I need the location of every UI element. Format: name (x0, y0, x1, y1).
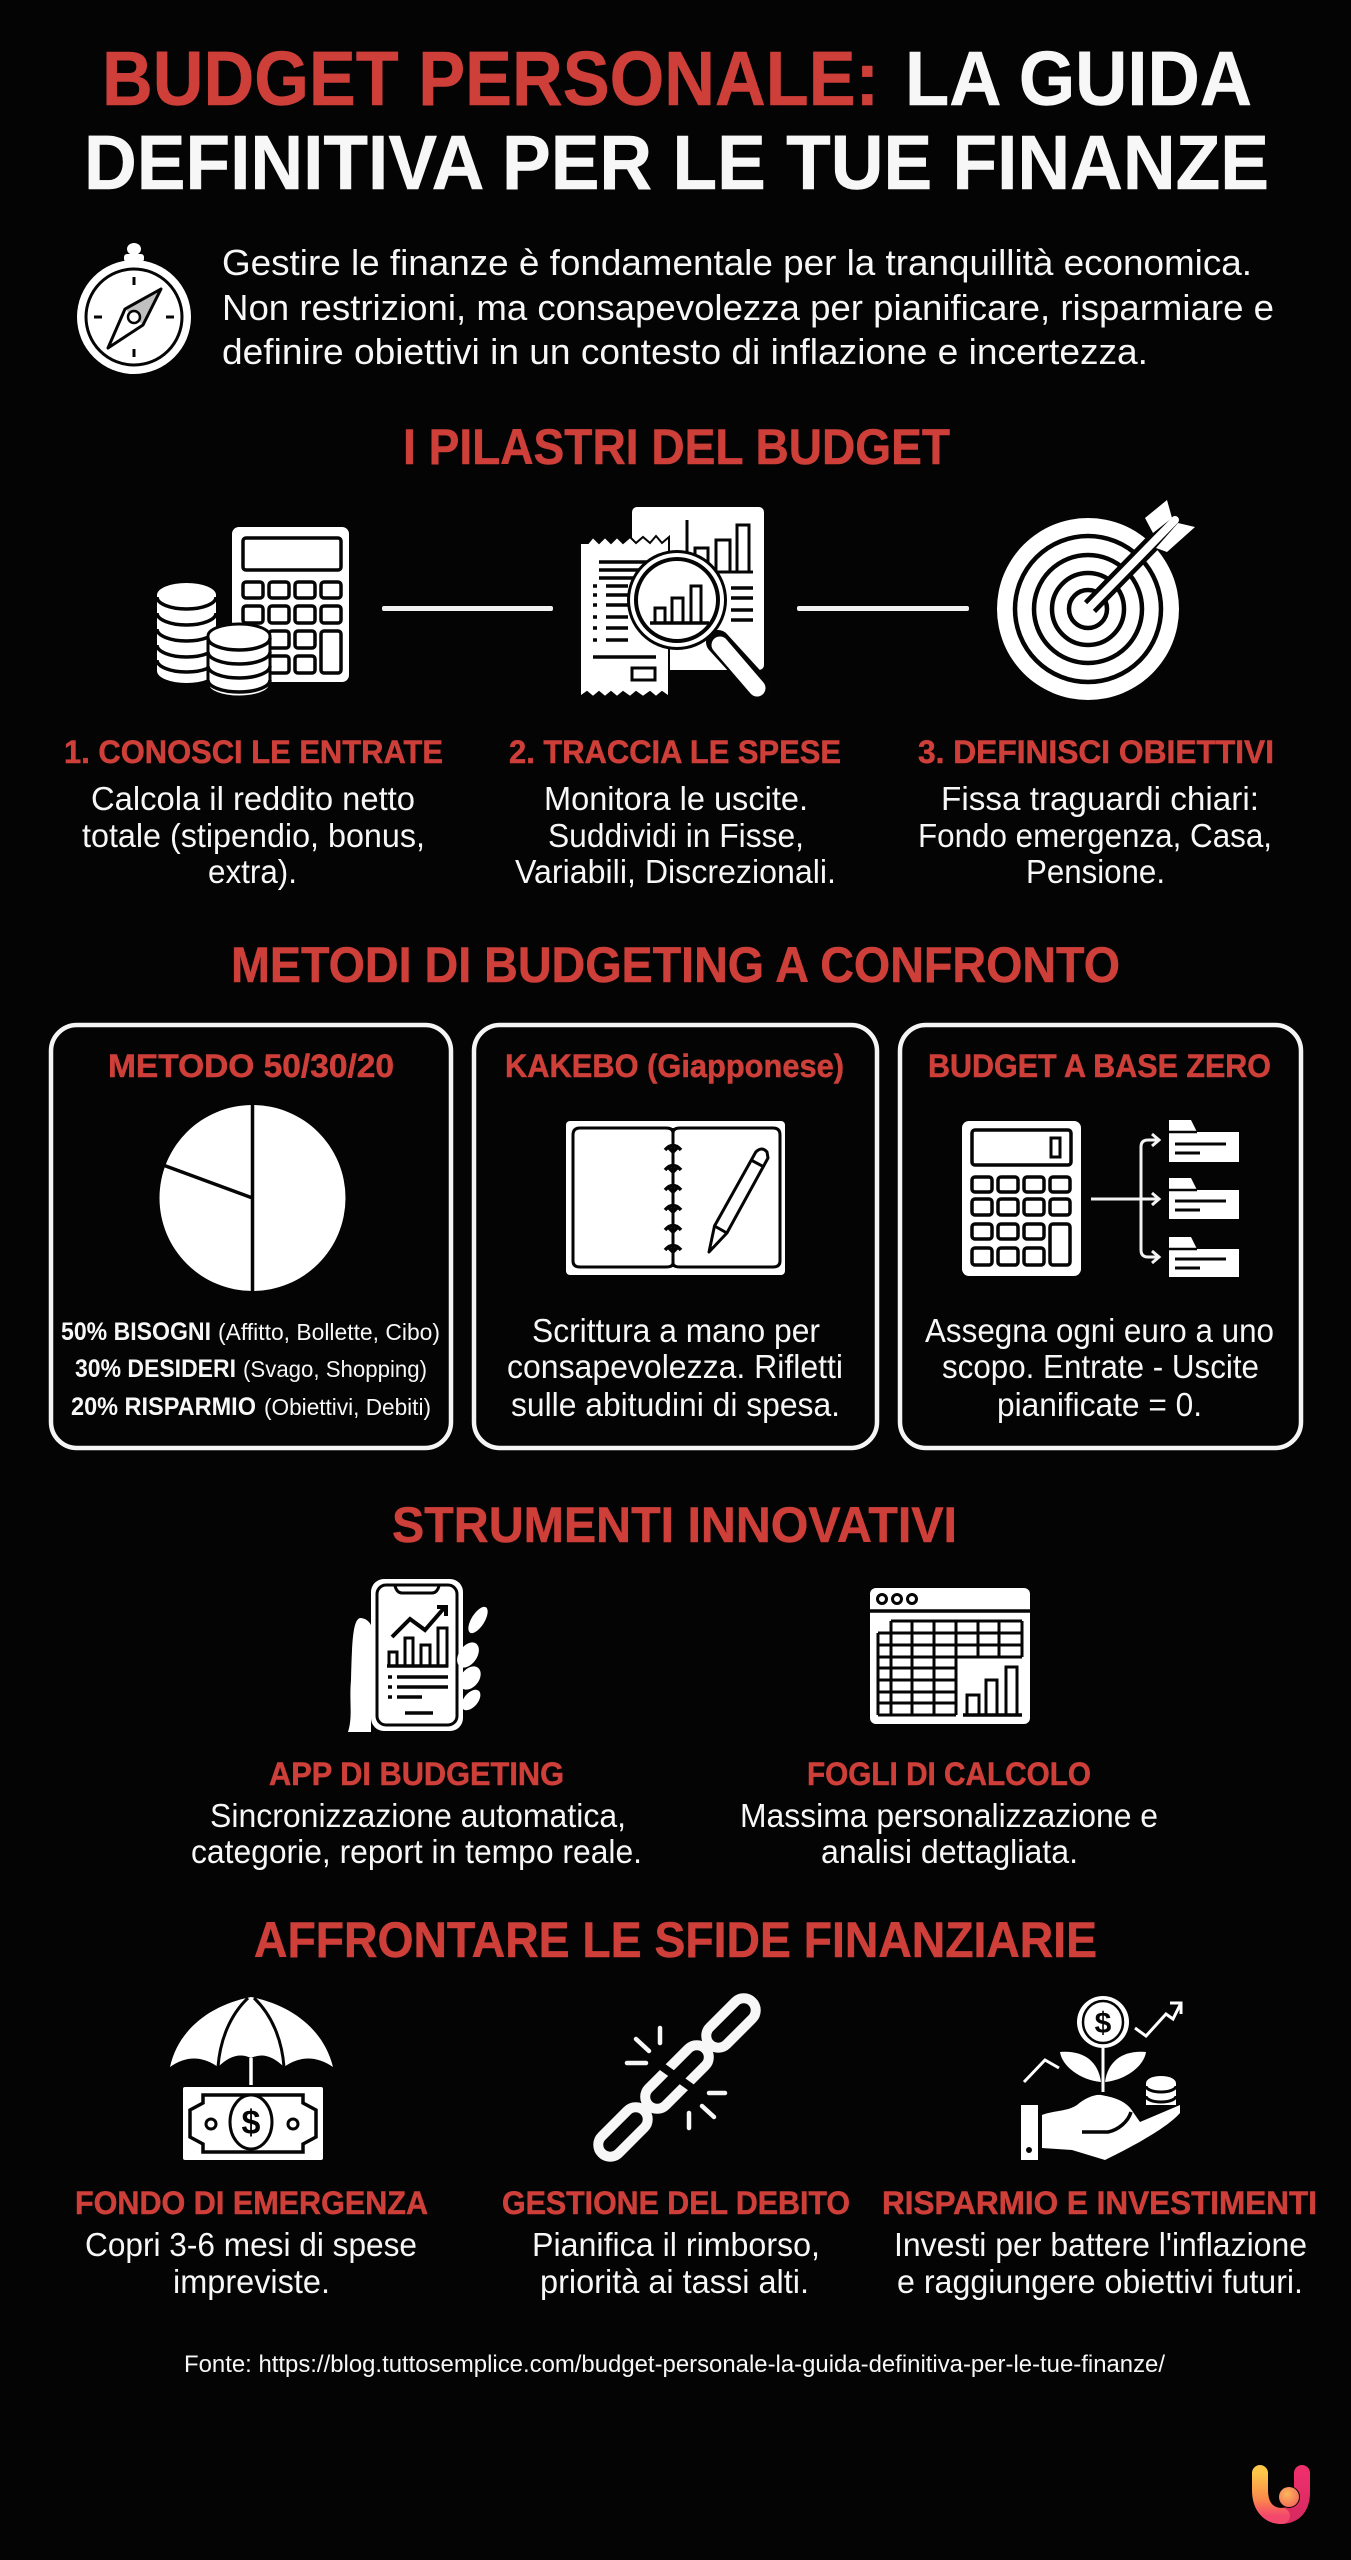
tool 1 text: APP DI BUDGETING (269, 1756, 564, 1792)
challenge 1 text (75, 2185, 428, 2300)
intro text: Gestire le finanze è fondamentale per la tranquillità economica. (222, 242, 1252, 283)
challenge 1 text: impreviste. (173, 2263, 330, 2300)
panel: budget a base zero (900, 1025, 1301, 1448)
intro text: definire obiettivi in un contesto di inflazione e incertezza. (222, 331, 1148, 372)
title: DEFINITIVA PER LE TUE FINANZE (84, 120, 1269, 206)
card text (925, 1312, 1274, 1423)
split legend: 50% BISOGNI (61, 1318, 211, 1346)
tool 2 text: FOGLI DI CALCOLO (807, 1756, 1091, 1792)
icon: target with arrow (997, 500, 1195, 700)
card title: KAKEBO (Giapponese) (505, 1048, 844, 1084)
heading: sfide: AFFRONTARE LE SFIDE FINANZIARIE (254, 1912, 1097, 1968)
panel: pilastri (64, 500, 1274, 890)
pillar 3 text (918, 734, 1274, 890)
pie chart (160, 1105, 346, 1291)
icon: calculator and coins (157, 527, 349, 697)
challenge 2 text: priorità ai tassi alti. (540, 2263, 809, 2300)
challenge 2 text: GESTIONE DEL DEBITO (502, 2185, 850, 2221)
intro text: Non restrizioni, ma consapevolezza per pianificare, risparmiare e (222, 287, 1274, 328)
icon: receipt and magnifier (580, 507, 764, 697)
icon: spreadsheet (870, 1588, 1030, 1724)
challenge 1 text: FONDO DI EMERGENZA (75, 2185, 428, 2221)
tool 1 text (191, 1756, 642, 1870)
pillar 1 text: totale (stipendio, bonus, (82, 817, 425, 854)
card text: Scrittura a mano per (532, 1312, 820, 1349)
challenge 1 text: Copri 3-6 mesi di spese (85, 2226, 417, 2263)
pillar 2 text: Suddividi in Fisse, (548, 817, 804, 854)
icon: investment growth hand (1021, 1996, 1181, 2160)
split legend: (Obiettivi, Debiti) (264, 1394, 431, 1420)
pillar 1 text: Calcola il reddito netto (91, 780, 415, 817)
logo (1260, 2473, 1302, 2516)
icon: compass (77, 243, 191, 374)
icon: phone in hand (348, 1579, 491, 1732)
card title: METODO 50/30/20 (108, 1048, 394, 1084)
pillar 2 text (509, 734, 841, 890)
icon: notebook and pen (566, 1121, 785, 1275)
pillar 2 text: 2. TRACCIA LE SPESE (509, 734, 841, 770)
card title: BUDGET A BASE ZERO (928, 1048, 1271, 1084)
tool 2 text: analisi dettagliata. (821, 1833, 1078, 1870)
tool 1 text: Sincronizzazione automatica, (210, 1797, 626, 1834)
heading: metodi: METODI DI BUDGETING A CONFRONTO (231, 937, 1120, 993)
card text: scopo. Entrate - Uscite (942, 1348, 1259, 1385)
tool 1 text: categorie, report in tempo reale. (191, 1833, 642, 1870)
pillar 3 text: Fondo emergenza, Casa, (918, 817, 1272, 854)
card text: Assegna ogni euro a uno (925, 1312, 1274, 1349)
tool 2 text: Massima personalizzazione e (740, 1797, 1158, 1834)
card text (507, 1312, 843, 1423)
split legend (61, 1318, 440, 1421)
tool 2 text (740, 1756, 1158, 1870)
panel: metodo 50/30/20 (51, 1025, 451, 1448)
challenge 3 text (882, 2185, 1317, 2300)
source line: Fonte: https://blog.tuttosemplice.com/budget-personale-la-guida-definitiva-per-le-tue-finanze/ (184, 2351, 1165, 2378)
pillar 3 text: Fissa traguardi chiari: (941, 780, 1259, 817)
challenge 3 text: e raggiungere obiettivi futuri. (897, 2263, 1303, 2300)
card text: pianificate = 0. (997, 1386, 1202, 1423)
intro text (222, 242, 1274, 372)
split legend: (Affitto, Bollette, Cibo) (218, 1319, 440, 1345)
pillar 3 text: 3. DEFINISCI OBIETTIVI (918, 734, 1274, 770)
pillar 1 text: 1. CONOSCI LE ENTRATE (64, 734, 443, 770)
pillar 1 text (64, 734, 443, 890)
panel: kakebo (474, 1025, 877, 1448)
split legend: 20% RISPARMIO (71, 1393, 256, 1421)
panel: sfide (75, 1993, 1317, 2300)
icon: umbrella over banknote (170, 1997, 333, 2160)
icon: broken chain (593, 1993, 761, 2162)
challenge 2 text: Pianifica il rimborso, (532, 2226, 820, 2263)
pillar 2 text: Monitora le uscite. (544, 780, 808, 817)
title: BUDGET PERSONALE: (102, 36, 879, 122)
heading: strumenti: STRUMENTI INNOVATIVI (392, 1497, 957, 1553)
split legend: 30% DESIDERI (75, 1355, 236, 1383)
icon: investment growth hand: $ (1095, 2007, 1112, 2040)
title: LA GUIDA (905, 36, 1252, 122)
panel: strumenti (191, 1579, 1158, 1870)
pillar 3 text: Pensione. (1026, 853, 1165, 890)
pillar 1 text: extra). (208, 853, 297, 890)
card text: sulle abitudini di spesa. (511, 1386, 840, 1423)
title (84, 36, 1269, 206)
card text: consapevolezza. Rifletti (507, 1348, 843, 1385)
challenge 3 text: Investi per battere l'inflazione (894, 2226, 1307, 2263)
pillar 2 text: Variabili, Discrezionali. (515, 853, 836, 890)
challenge 2 text (502, 2185, 850, 2300)
split legend: (Svago, Shopping) (243, 1356, 427, 1382)
connector line 1 (382, 606, 553, 611)
challenge 3 text: RISPARMIO E INVESTIMENTI (882, 2185, 1317, 2221)
connector line 2 (797, 606, 969, 611)
icon: calculator with folders (962, 1120, 1239, 1277)
icon: umbrella over banknote: $ (242, 2104, 261, 2142)
heading: pilastri: I PILASTRI DEL BUDGET (403, 419, 950, 475)
